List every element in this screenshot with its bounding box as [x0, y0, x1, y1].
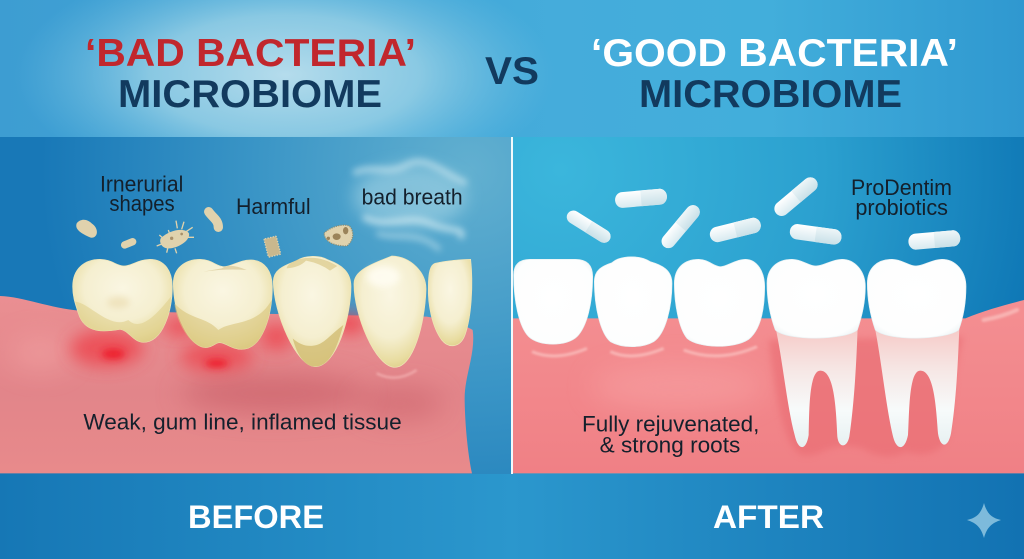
white tooth 3 [674, 259, 765, 346]
bacterium curved [209, 212, 218, 227]
tooth 5 [428, 259, 472, 346]
title: bad bacteria microbiome [85, 32, 416, 116]
white tooth 5 [867, 259, 966, 338]
tooth 2 [173, 259, 272, 349]
white tooth 1 [514, 259, 593, 344]
label: irregular shapes [100, 172, 183, 216]
center divider [511, 137, 513, 474]
tooth 3 [273, 256, 351, 367]
label: weak gum line: Weak, gum line, inflamed tissue [83, 409, 402, 434]
label: before: BEFORE [188, 499, 324, 535]
white tooth 2 [594, 257, 672, 347]
label: bad breath: bad breath [362, 184, 463, 209]
bacteria [76, 212, 353, 257]
label: prodentim probiotics: probiotics [855, 195, 948, 220]
tooth 4 [354, 256, 426, 367]
label: prodentim probiotics: ProDentim [851, 175, 952, 200]
title: vs: VS [485, 50, 539, 93]
title: good bacteria microbiome: ‘GOOD BACTERIA’ [591, 32, 958, 75]
label: prodentim probiotics [851, 175, 952, 220]
label: fully rejuvenated: Fully rejuvenated, [582, 412, 759, 437]
label: irregular shapes: Irnerurial [100, 172, 183, 197]
yellowed teeth [73, 256, 472, 367]
title: good bacteria microbiome: MICROBIOME [639, 73, 902, 116]
tooth 1 [73, 259, 172, 342]
bacterium spotted [324, 225, 353, 246]
icon: sparkle [967, 503, 1001, 538]
root: molar 2 [875, 327, 959, 447]
gum: inflamed [0, 296, 473, 473]
label: harmful: Harmful [236, 194, 311, 219]
label: fully rejuvenated [582, 412, 759, 457]
header background [0, 0, 1024, 137]
footer bar [0, 474, 1024, 559]
bacterium rough [264, 236, 281, 257]
label: irregular shapes: shapes [109, 191, 175, 216]
probiotic capsules [564, 174, 961, 251]
title: good bacteria microbiome [591, 32, 958, 116]
white teeth [514, 257, 966, 347]
bacterium blob [76, 220, 97, 238]
label: fully rejuvenated: & strong roots [600, 432, 740, 457]
white tooth 4 [767, 259, 865, 338]
panel: before [0, 137, 512, 474]
title: bad bacteria microbiome: ‘BAD BACTERIA’ [85, 32, 416, 75]
panel: after [512, 137, 1024, 474]
bacterium rod [120, 237, 137, 250]
gum: healthy [512, 300, 1024, 473]
bad breath cloud [353, 162, 467, 250]
label: after: AFTER [713, 499, 824, 535]
title: bad bacteria microbiome: MICROBIOME [118, 73, 382, 116]
bacterium spiky [157, 221, 194, 253]
root: molar 1 [775, 327, 858, 447]
